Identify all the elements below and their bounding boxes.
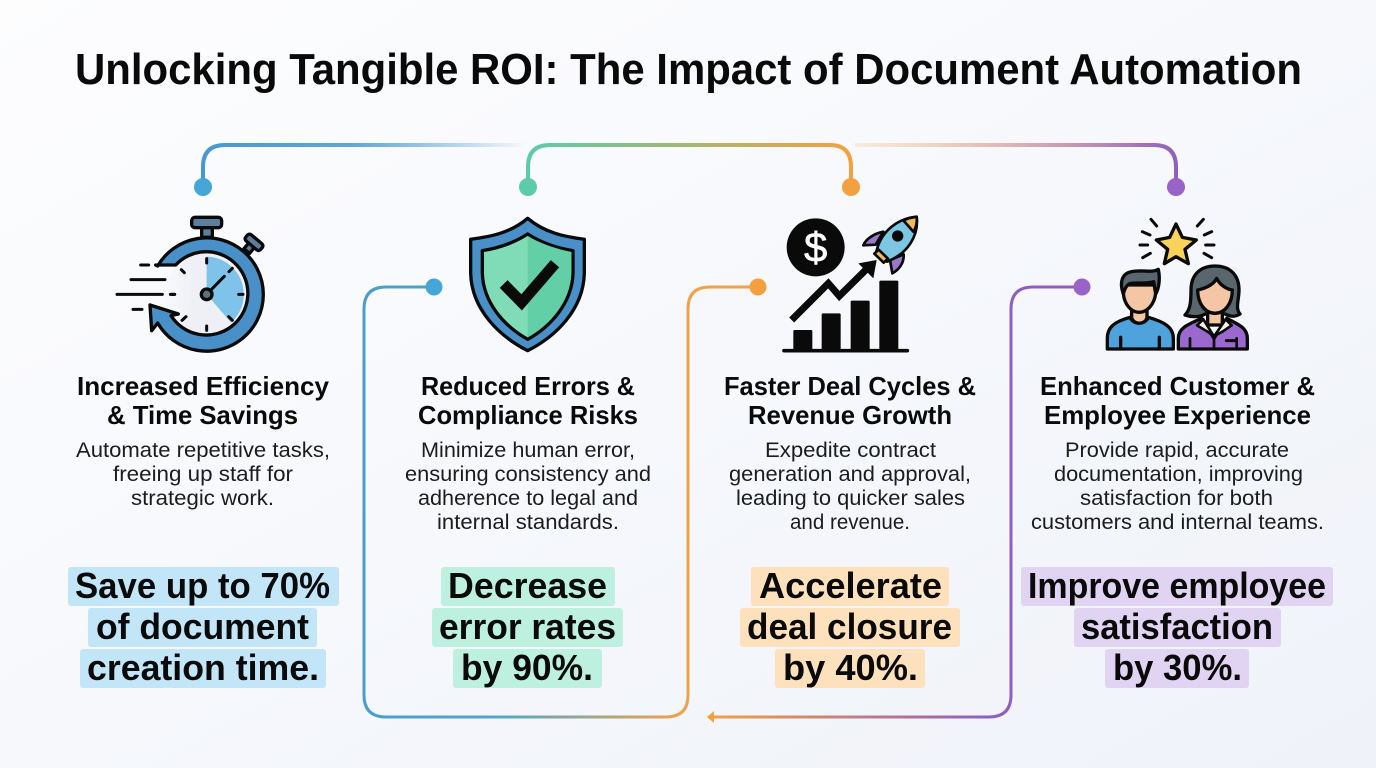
stat callout: by 90%. bbox=[461, 647, 593, 688]
panel: errors bbox=[405, 218, 651, 688]
description bbox=[76, 439, 330, 510]
stat callout: of document bbox=[96, 606, 309, 647]
description: Expedite contract bbox=[765, 439, 936, 462]
icon: two people and star bbox=[1107, 219, 1247, 349]
description: generation and approval, bbox=[729, 463, 971, 486]
stat callout: Save up to 70% bbox=[75, 565, 330, 606]
description: strategic work. bbox=[131, 487, 274, 510]
heading: Revenue Growth bbox=[748, 400, 952, 430]
heading bbox=[418, 371, 638, 430]
heading bbox=[724, 371, 976, 430]
stat callout: error rates bbox=[439, 606, 616, 647]
stat callout bbox=[740, 565, 960, 688]
icon: stopwatch bbox=[117, 217, 264, 351]
description bbox=[1031, 439, 1324, 534]
panel: experience bbox=[1021, 219, 1333, 688]
stat callout: satisfaction bbox=[1081, 606, 1273, 647]
description: internal standards. bbox=[437, 511, 619, 534]
lower connector: purple arrow bbox=[707, 278, 1090, 723]
description: Automate repetitive tasks, bbox=[76, 439, 330, 462]
heading: Reduced Errors & bbox=[421, 371, 635, 401]
description: and revenue. bbox=[790, 511, 910, 534]
panel: deals bbox=[724, 217, 976, 688]
description bbox=[405, 439, 651, 534]
icon: dollar, growth chart and rocket bbox=[784, 217, 917, 351]
description: documentation, improving bbox=[1054, 463, 1303, 486]
description: freeing up staff for bbox=[113, 463, 293, 486]
description: Minimize human error, bbox=[421, 439, 635, 462]
lower connector: blue to orange bbox=[364, 278, 766, 717]
title: Unlocking Tangible ROI: The Impact of Document Automation bbox=[75, 45, 1302, 94]
heading: & Time Savings bbox=[107, 400, 298, 430]
top connector: errors to deals bbox=[519, 145, 860, 196]
icon: shield bbox=[471, 218, 584, 351]
description: satisfaction for both bbox=[1080, 487, 1273, 510]
top connector: experience bbox=[855, 145, 1185, 196]
heading bbox=[77, 371, 330, 430]
icon: dollar, growth chart and rocket: $ bbox=[804, 223, 827, 270]
heading: Increased Efficiency bbox=[77, 371, 330, 401]
stat callout: by 40%. bbox=[783, 647, 918, 688]
description: ensuring consistency and bbox=[405, 463, 651, 486]
stat callout bbox=[68, 565, 339, 688]
stat callout: Improve employee bbox=[1028, 565, 1326, 606]
stat callout: deal closure bbox=[747, 606, 952, 647]
heading bbox=[1040, 371, 1315, 430]
stat callout: Accelerate bbox=[759, 565, 942, 606]
stat callout bbox=[432, 565, 623, 688]
description bbox=[729, 439, 971, 534]
stat callout: Decrease bbox=[448, 565, 607, 606]
top connector: efficiency bbox=[194, 145, 527, 196]
heading: Compliance Risks bbox=[418, 400, 638, 430]
description: Provide rapid, accurate bbox=[1065, 439, 1289, 462]
stat callout bbox=[1021, 565, 1333, 688]
heading: Employee Experience bbox=[1044, 400, 1311, 430]
description: leading to quicker sales bbox=[736, 487, 965, 510]
heading: Faster Deal Cycles & bbox=[724, 371, 976, 401]
stat callout: creation time. bbox=[87, 647, 319, 688]
stat callout: by 30%. bbox=[1113, 647, 1242, 688]
description: adherence to legal and bbox=[418, 487, 638, 510]
heading: Enhanced Customer & bbox=[1040, 371, 1315, 401]
description: customers and internal teams. bbox=[1031, 511, 1324, 534]
panel: efficiency bbox=[68, 217, 339, 688]
